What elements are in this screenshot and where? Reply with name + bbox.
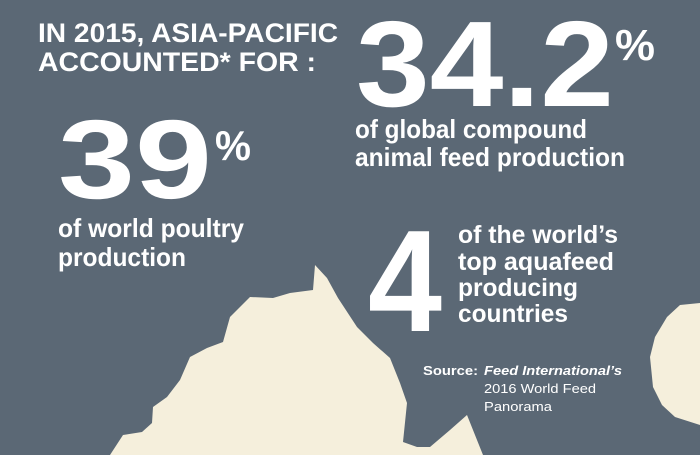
- text: poultry: production: [58, 242, 186, 272]
- text: global compound feed: animal feed production: [355, 142, 625, 172]
- text: aquafeed: producing: [458, 274, 578, 302]
- source note: [423, 363, 622, 414]
- text: aquafeed: countries: [458, 300, 568, 328]
- stat: 39%: 39: [58, 97, 212, 222]
- map: right blob: [650, 303, 700, 425]
- title: [38, 18, 338, 77]
- title: ACCOUNTED* FOR :: [38, 47, 316, 77]
- source note: Feed International’s: [484, 363, 622, 378]
- text: aquafeed: of the world’s: [458, 221, 618, 249]
- stat: 39%: %: [215, 122, 251, 169]
- stat: 34.2%: 34.2: [356, 0, 614, 132]
- text: global compound feed: of global compound: [355, 114, 587, 144]
- title: IN 2015, ASIA-PACIFIC: [38, 18, 338, 48]
- source note: Source:: [423, 363, 478, 378]
- stat: 34.2%: %: [615, 21, 655, 70]
- source note: 2016 World Feed: [484, 381, 596, 396]
- text: global compound feed: [355, 114, 625, 172]
- stat: 39%: [58, 97, 251, 222]
- text: poultry: [58, 213, 245, 272]
- stat: 4: 4: [368, 200, 442, 362]
- source note: Panorama: [484, 399, 553, 414]
- text: aquafeed: top aquafeed: [458, 248, 614, 276]
- text: poultry: of world poultry: [58, 213, 245, 243]
- map: landmass: [110, 265, 483, 455]
- text: aquafeed: [458, 221, 618, 328]
